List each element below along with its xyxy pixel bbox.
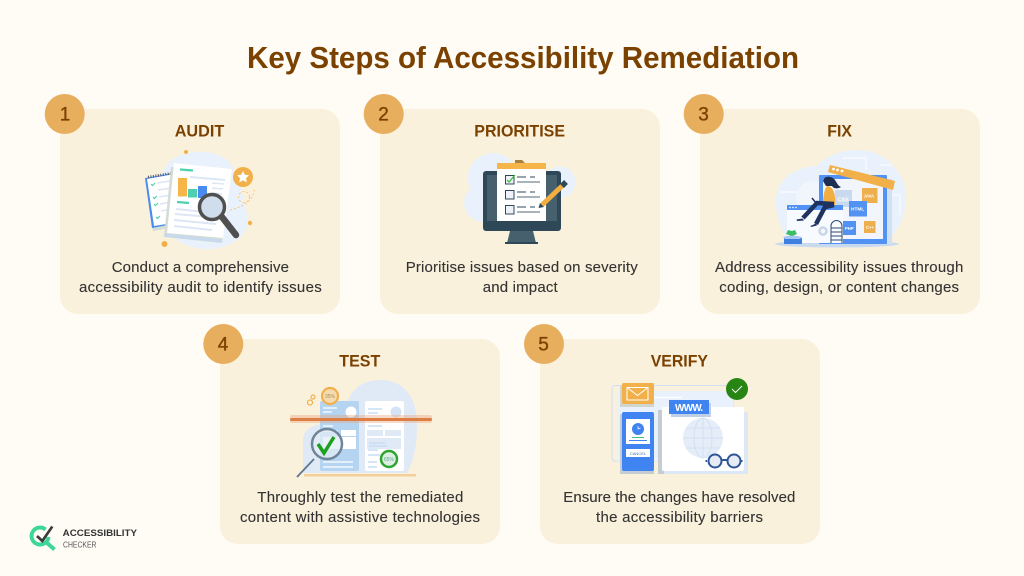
step badge 5: 5: [538, 335, 549, 356]
panel: fix: [684, 94, 980, 314]
step badge 5: [524, 324, 564, 364]
description: verify: Ensure the changes have resolved: [563, 489, 795, 506]
title: Key Steps of Accessibility Remediation: [247, 40, 799, 75]
icon: verified website on phone and browser: CANCEL: [630, 451, 647, 456]
icon: developer working on code window: HTML: [851, 206, 864, 212]
icon: checklist on monitor: [464, 153, 576, 244]
description: test: [240, 489, 480, 526]
description: verify: [563, 489, 795, 526]
panel: audit: [45, 94, 340, 314]
icon: testing screens with magnifier: 35%: [325, 394, 336, 400]
logo: accessibility checker: [32, 526, 138, 550]
step badge 2: 2: [378, 105, 389, 126]
icon: developer working on code window: CSS: [838, 198, 849, 204]
logo: accessibility checker: ACCESSIBILITY: [63, 528, 138, 539]
step badge 2: [364, 94, 404, 134]
description: prioritise: [406, 259, 638, 296]
panel: verify: [524, 324, 820, 544]
description: verify: the accessibility barriers: [596, 509, 763, 526]
icon: developer working on code window: PHP: [845, 226, 854, 231]
description: prioritise: Prioritise issues based on severity: [406, 259, 638, 276]
description: audit: [79, 259, 322, 296]
panel: test: [203, 324, 500, 544]
icon: testing screens with magnifier: [290, 380, 432, 477]
heading: verify: VERIFY: [651, 353, 708, 371]
description: fix: coding, design, or content changes: [719, 279, 959, 296]
heading: fix: FIX: [827, 123, 852, 141]
step badge 3: [684, 94, 724, 134]
description: test: content with assistive technologies: [240, 509, 480, 526]
step badge 4: [203, 324, 243, 364]
icon: developer working on code window: JAVA: [864, 194, 874, 198]
step badge 4: 4: [218, 335, 229, 356]
icon: testing screens with magnifier: 65%: [384, 457, 395, 463]
description: audit: accessibility audit to identify issues: [79, 279, 322, 296]
heading: test: TEST: [339, 353, 380, 371]
step badge 1: 1: [60, 105, 70, 126]
panel: prioritise: [364, 94, 660, 314]
icon: verified website on phone and browser: WWW.: [675, 403, 703, 414]
description: fix: [715, 259, 963, 296]
step badge 3: 3: [698, 105, 709, 126]
icon: developer working on code window: [775, 150, 906, 248]
description: fix: Address accessibility issues through: [715, 259, 963, 276]
heading: prioritise: PRIORITISE: [474, 123, 565, 141]
logo: accessibility checker: CHECKER: [63, 540, 97, 550]
icon: verified website on phone and browser: [612, 378, 748, 474]
description: test: Throughly test the remediated: [257, 489, 463, 506]
heading: audit: AUDIT: [175, 123, 224, 141]
description: prioritise: and impact: [483, 279, 559, 296]
icon: audit report under magnifier: [145, 150, 254, 249]
step badge 1: [45, 94, 85, 134]
icon: developer working on code window: C++: [866, 225, 874, 230]
description: audit: Conduct a comprehensive: [112, 259, 289, 276]
